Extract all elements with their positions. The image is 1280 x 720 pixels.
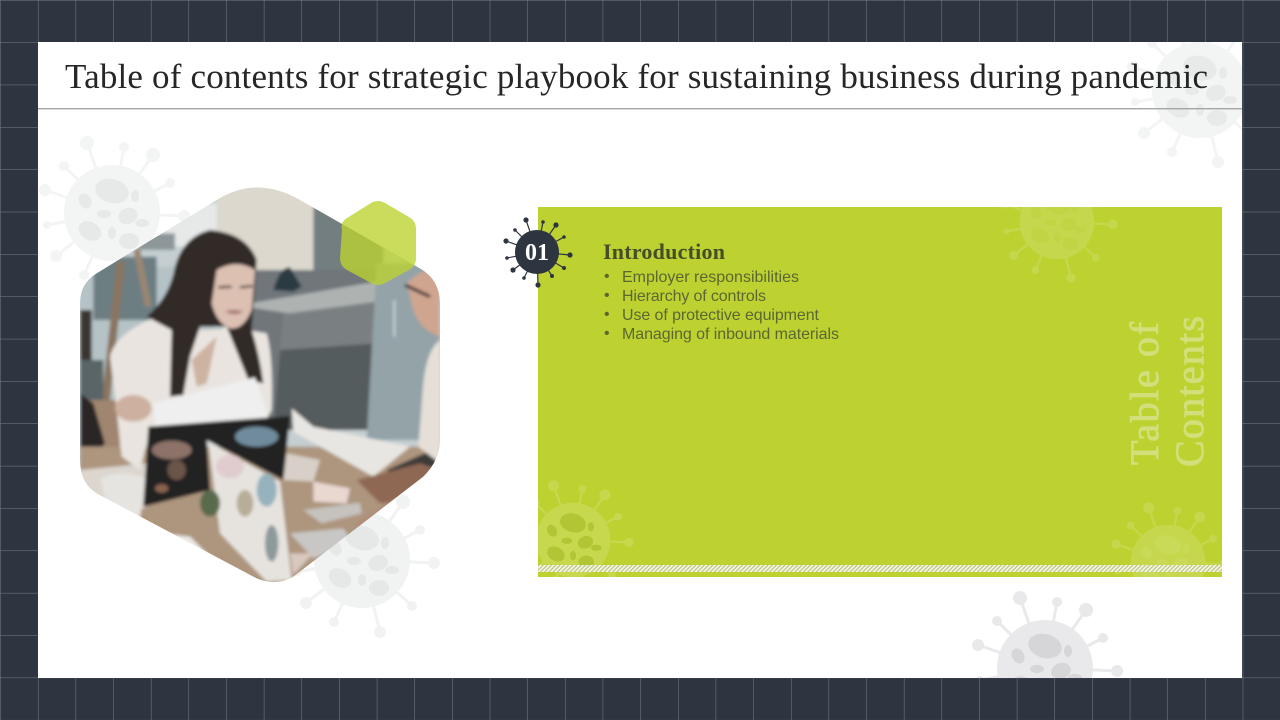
rotated label: Table of Contents	[1122, 316, 1212, 467]
bullet list: Use of protective equipment	[622, 307, 820, 324]
title divider	[38, 108, 1242, 109]
section heading: Introduction: Introduction	[603, 239, 725, 264]
virus: bottom right	[972, 591, 1123, 678]
bullet list: •	[604, 306, 610, 323]
photo: meeting in rounded hexagon	[80, 188, 440, 582]
virus: top right	[1127, 42, 1242, 168]
virus: green card bottom left	[538, 480, 634, 577]
virus: below photo	[295, 495, 440, 638]
virus: green card bottom right	[1111, 502, 1222, 577]
badge: 01 virus icon	[503, 217, 573, 288]
rotated label: Table of Contents: Table of	[1122, 321, 1167, 465]
bullet list: •	[604, 287, 610, 304]
bullet list: Employer responsibilities	[622, 269, 799, 286]
bullet list: •	[604, 268, 610, 285]
hatched stripe	[538, 565, 1222, 572]
green content card background	[538, 207, 1222, 577]
bullet list: Hierarchy of controls	[622, 288, 766, 305]
title: Table of contents for strategic playbook for sustaining business during pandemic	[65, 57, 1208, 96]
bullet list: •	[604, 325, 610, 342]
small translucent green hexagon	[340, 201, 416, 285]
virus: green card top	[1002, 207, 1118, 282]
bullet list: Managing of inbound materials	[622, 326, 839, 343]
virus: top left	[39, 136, 190, 291]
decorative viruses on green card	[508, 207, 1222, 577]
badge: 01 virus icon: 01	[525, 240, 549, 266]
rotated label: Table of Contents: Contents	[1167, 316, 1212, 467]
bullet list	[604, 268, 839, 343]
